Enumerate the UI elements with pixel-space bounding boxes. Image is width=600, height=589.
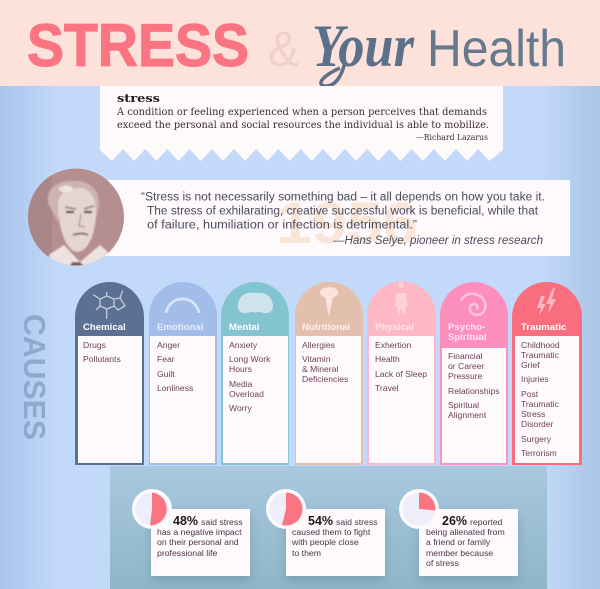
card: emotional: Guilt	[157, 369, 175, 379]
card: mental: Worry	[229, 403, 252, 413]
definition panel: —Richard Lazarus	[416, 132, 488, 142]
stat: 54%: caused them to fight	[292, 527, 371, 537]
card: traumatic: Surgery	[521, 434, 552, 444]
card: traumatic: Traumatic	[521, 350, 560, 360]
icon: molecule	[93, 291, 125, 319]
title: Health	[427, 20, 566, 78]
quote text: —Hans Selye, pioneer in stress research	[332, 235, 543, 247]
quote text: “Stress is not necessarily something bad – it all depends on how you take it.	[141, 192, 545, 204]
icon: brain	[238, 293, 273, 313]
icon: carrot	[320, 287, 338, 317]
card: psycho-spiritual: Spiritual	[448, 400, 479, 410]
card: traumatic: Stress	[521, 409, 545, 419]
card: nutritional: Vitamin	[302, 354, 331, 364]
card: mental: Anxiety	[229, 340, 258, 350]
title	[27, 12, 566, 86]
card: psycho-spiritual: Pressure	[448, 371, 483, 381]
card: nutritional: Allergies	[302, 340, 335, 350]
card: traumatic: Traumatic	[521, 399, 560, 409]
portrait	[28, 168, 124, 266]
stat: 26%	[399, 489, 518, 581]
title: STRESS	[27, 12, 249, 79]
card: nutritional: Nutritional	[302, 322, 350, 333]
card: mental: Overload	[229, 389, 264, 399]
card: chemical: Chemical	[83, 322, 126, 333]
card: nutritional: Deficiencies	[302, 374, 348, 384]
definition panel: exceed the personal and social resources the individual is able to mobilize.	[117, 120, 489, 131]
card: psycho-spiritual: Spiritual	[448, 332, 486, 343]
title: Your	[312, 13, 415, 79]
card: mental	[221, 282, 289, 465]
card: traumatic: Disorder	[521, 419, 554, 429]
icon: lightning bolts	[537, 288, 556, 316]
card: chemical	[75, 282, 144, 465]
card: emotional	[149, 282, 217, 465]
card: psycho-spiritual	[440, 282, 508, 465]
card: psycho-spiritual: Financial	[448, 351, 482, 361]
card: traumatic: Childhood	[521, 340, 560, 350]
card: emotional: Emotional	[157, 322, 203, 333]
pie chart 48%	[132, 489, 172, 529]
card: traumatic: Grief	[521, 360, 540, 370]
card: chemical: Drugs	[83, 340, 106, 350]
definition panel: stress	[117, 92, 160, 105]
stat: 54%	[266, 489, 385, 581]
card: mental: Media	[229, 379, 253, 389]
title banner	[0, 0, 600, 86]
card: chemical: Pollutants	[83, 354, 121, 364]
card: mental: Hours	[229, 364, 252, 374]
quote text	[141, 192, 545, 247]
quote text: The stress of exhilarating, creative successful work is beneficial, while that	[147, 206, 539, 218]
card: nutritional: & Mineral	[302, 364, 338, 374]
card: mental: Mental	[229, 322, 259, 333]
quote text: of failure, humiliation or infection is detrimental.”	[147, 220, 417, 232]
stat: 26%: a friend or family	[426, 537, 491, 547]
stat: 26%: 26% reported	[442, 514, 503, 528]
card: psycho-spiritual: Relationships	[448, 386, 500, 396]
stat: 54%: with people close	[291, 537, 359, 547]
stat: 48%: 48% said stress	[173, 514, 243, 528]
card: physical: Exhertion	[375, 340, 412, 350]
stat: 48%	[132, 489, 250, 581]
title: &	[268, 21, 299, 77]
stat: 26%: of stress	[426, 558, 459, 568]
stat: 48%: professional life	[157, 548, 218, 558]
card: traumatic	[512, 282, 582, 465]
card: physical: Lack of Sleep	[375, 369, 427, 379]
card: physical: Travel	[375, 383, 399, 393]
card: physical: Physical	[375, 322, 414, 333]
pie chart 26%	[399, 489, 439, 529]
year watermark: 1956	[276, 191, 418, 256]
card: emotional: Fear	[157, 354, 175, 364]
stat: 54%: to them	[292, 548, 321, 558]
card: psycho-spiritual: Alignment	[448, 410, 487, 420]
card: mental: Long Work	[229, 354, 271, 364]
stat: 26%: being alienated from	[426, 527, 505, 537]
icon: human figure	[395, 282, 408, 315]
pie chart 54%	[266, 489, 306, 529]
card: nutritional	[295, 282, 363, 465]
card: traumatic: Terrorism	[521, 448, 557, 458]
icon: arc	[166, 299, 199, 313]
bottom panel	[110, 466, 547, 589]
card: traumatic: Post	[521, 389, 539, 399]
quote panel	[100, 180, 570, 256]
stat: 48%: has a negative impact	[157, 527, 242, 537]
card: physical: Health	[375, 354, 400, 364]
card: physical	[367, 282, 436, 465]
icon: spiral	[461, 294, 485, 315]
stat: 26%: member because	[426, 548, 493, 558]
card: psycho-spiritual: or Career	[448, 361, 484, 371]
card: emotional: Anger	[157, 340, 180, 350]
definition panel: A condition or feeling experienced when a person perceives that demands	[116, 107, 487, 118]
card: emotional: Lonliness	[157, 383, 193, 393]
card: psycho-spiritual: Psycho-	[448, 322, 485, 333]
definition panel	[100, 86, 503, 161]
card: traumatic: Traumatic	[521, 322, 567, 333]
causes label: CAUSES	[17, 314, 52, 440]
card: traumatic: Injuries	[521, 374, 549, 384]
stat: 54%: 54% said stress	[308, 514, 378, 528]
stat: 48%: on their personal and	[157, 537, 239, 547]
